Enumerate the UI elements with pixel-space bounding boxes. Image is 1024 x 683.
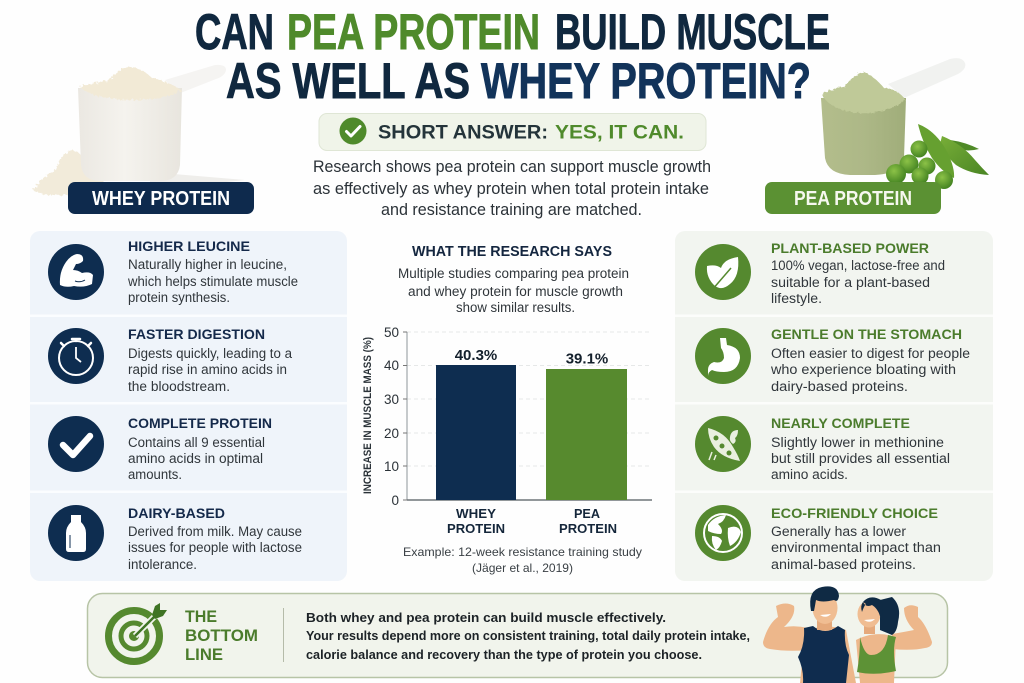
item: higher leucine: HIGHER LEUCINE bbox=[128, 238, 250, 254]
bar chart: 39.1% bbox=[566, 350, 608, 368]
item: faster digestion: the bloodstream. bbox=[128, 379, 230, 394]
item: complete protein bbox=[48, 415, 272, 482]
item: dairy-based: DAIRY-BASED bbox=[128, 505, 225, 521]
panel: what the research says bbox=[362, 244, 652, 575]
item: dairy-based: issues for people with lactose bbox=[128, 540, 302, 555]
item: nearly complete: NEARLY COMPLETE bbox=[771, 415, 910, 431]
bar chart bbox=[362, 325, 652, 536]
item: nearly complete bbox=[695, 415, 950, 482]
bar chart: PEA bbox=[574, 506, 601, 521]
item: higher leucine bbox=[48, 238, 298, 305]
callout: short answer: SHORT ANSWER: bbox=[378, 122, 548, 144]
illustration: man and woman flexing bbox=[763, 586, 932, 683]
badge: whey protein bbox=[68, 182, 254, 214]
item: faster digestion: Digests quickly, leading to a bbox=[128, 346, 292, 361]
badge: whey protein: WHEY PROTEIN bbox=[92, 188, 230, 210]
study note bbox=[403, 545, 642, 575]
heading: the bottom line: BOTTOM bbox=[185, 626, 258, 645]
badge: pea protein bbox=[765, 182, 941, 214]
item: higher leucine: Naturally higher in leucine, bbox=[128, 257, 287, 272]
research description: Multiple studies comparing pea protein bbox=[398, 266, 629, 281]
bar chart: WHEY bbox=[456, 506, 496, 521]
heading: what the research says: WHAT THE RESEARCH SAYS bbox=[412, 244, 612, 260]
item: nearly complete: but still provides all essential bbox=[771, 451, 950, 466]
bar chart: PROTEIN bbox=[447, 521, 505, 536]
bottom line text: Both whey and pea protein can build muscle effectively. bbox=[306, 610, 666, 625]
item: plant-based power: 100% vegan, lactose-free and bbox=[771, 258, 945, 273]
item: dairy-based: intolerance. bbox=[128, 557, 197, 572]
title bbox=[195, 4, 830, 109]
item: eco-friendly choice: animal-based proteins. bbox=[771, 557, 916, 572]
woman bbox=[856, 597, 932, 683]
bar chart: INCREASE IN MUSCLE MASS (%) bbox=[362, 337, 374, 494]
heading: the bottom line: LINE bbox=[185, 645, 223, 664]
study note: Example: 12-week resistance training study bbox=[403, 545, 642, 559]
item: plant-based power: PLANT-BASED POWER bbox=[771, 240, 929, 256]
bar chart: 20 bbox=[384, 426, 399, 441]
study note: (Jäger et al., 2019) bbox=[472, 561, 573, 575]
intro text bbox=[313, 158, 711, 219]
intro text: Research shows pea protein can support muscle growth bbox=[313, 158, 711, 176]
icon: check circle bbox=[340, 118, 366, 144]
item: dairy-based bbox=[48, 505, 302, 572]
panel: whey protein benefits bbox=[30, 231, 347, 581]
intro text: and resistance training are matched. bbox=[381, 201, 642, 219]
item: higher leucine: protein synthesis. bbox=[128, 290, 230, 305]
bar chart: 50 bbox=[384, 325, 399, 340]
bar chart: PROTEIN bbox=[559, 521, 617, 536]
illustration: pea protein scoop with pea pods bbox=[821, 58, 989, 189]
item: faster digestion: FASTER DIGESTION bbox=[128, 326, 265, 342]
panel: the bottom line bbox=[88, 594, 948, 678]
callout: short answer: YES, IT CAN. bbox=[555, 122, 684, 144]
item: complete protein: Contains all 9 essential bbox=[128, 435, 265, 450]
item: faster digestion: rapid rise in amino acids in bbox=[128, 362, 287, 377]
item: eco-friendly choice: ECO-FRIENDLY CHOICE bbox=[771, 505, 938, 521]
item: gentle on the stomach: GENTLE ON THE STOMACH bbox=[771, 326, 962, 342]
heading: the bottom line: THE bbox=[185, 607, 217, 626]
callout: short answer bbox=[319, 114, 706, 150]
item: eco-friendly choice: Generally has a lower bbox=[771, 524, 907, 539]
man bbox=[763, 586, 856, 683]
bottom line text: calorie balance and recovery than the type of protein you choose. bbox=[306, 647, 702, 662]
icon: target with arrow bbox=[108, 603, 167, 662]
item: eco-friendly choice bbox=[695, 505, 941, 572]
item: complete protein: amino acids in optimal bbox=[128, 451, 263, 466]
bottom line text bbox=[306, 610, 750, 662]
item: plant-based power bbox=[695, 240, 945, 306]
item: gentle on the stomach: dairy-based proteins. bbox=[771, 379, 908, 394]
item: plant-based power: lifestyle. bbox=[771, 291, 822, 306]
title: BUILD MUSCLE bbox=[555, 4, 830, 60]
illustration: whey protein scoop bbox=[33, 65, 245, 195]
item: nearly complete: amino acids. bbox=[771, 467, 848, 482]
research description: show similar results. bbox=[456, 300, 575, 315]
research description: and whey protein for muscle growth bbox=[408, 284, 623, 299]
title: AS WELL AS bbox=[226, 53, 470, 109]
item: gentle on the stomach: Often easier to digest for people bbox=[771, 346, 970, 361]
badge: pea protein: PEA PROTEIN bbox=[794, 188, 912, 210]
item: higher leucine: which helps stimulate muscle bbox=[127, 274, 298, 289]
item: plant-based power: suitable for a plant-based bbox=[771, 275, 930, 290]
bar chart: 40 bbox=[384, 358, 399, 373]
bar chart: 30 bbox=[384, 392, 399, 407]
bar chart: 0 bbox=[391, 493, 399, 508]
title: WHEY PROTEIN? bbox=[481, 53, 811, 109]
item: nearly complete: Slightly lower in methionine bbox=[771, 435, 944, 450]
title: PEA PROTEIN bbox=[287, 4, 540, 60]
bar chart: 10 bbox=[384, 459, 399, 474]
item: dairy-based: Derived from milk. May cause bbox=[128, 524, 302, 539]
item: faster digestion bbox=[48, 326, 292, 394]
intro text: as effectively as whey protein when total protein intake bbox=[313, 180, 709, 198]
panel: pea protein benefits bbox=[675, 231, 993, 581]
bottom line text: Your results depend more on consistent training, total daily protein intake, bbox=[306, 628, 750, 643]
bar chart: 40.3% bbox=[455, 347, 497, 364]
item: complete protein: amounts. bbox=[128, 467, 182, 482]
title: CAN bbox=[195, 4, 274, 60]
research description bbox=[398, 266, 629, 315]
heading: the bottom line bbox=[185, 607, 258, 664]
item: gentle on the stomach bbox=[695, 326, 970, 394]
item: gentle on the stomach: who experience bloating with bbox=[770, 362, 956, 377]
item: complete protein: COMPLETE PROTEIN bbox=[128, 415, 272, 431]
item: eco-friendly choice: environmental impact than bbox=[771, 540, 941, 555]
